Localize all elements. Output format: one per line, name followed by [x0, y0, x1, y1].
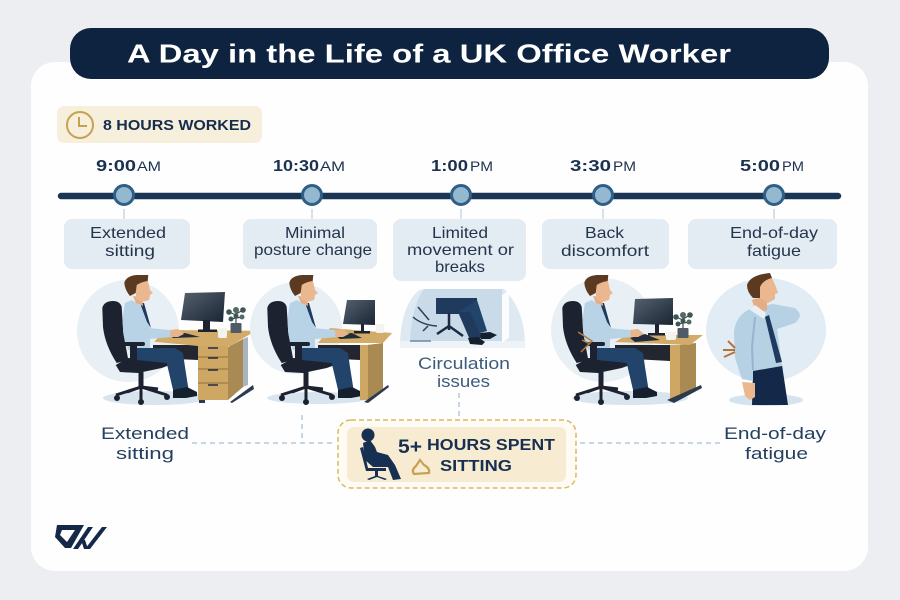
card: minimal posture change: [243, 219, 377, 269]
callout: 5+ hours spent sitting: SITTING: [440, 458, 512, 475]
label: end-of-day fatigue: End-of-day: [724, 424, 827, 443]
label: end-of-day fatigue: [724, 424, 827, 463]
label: circulation issues: Circulation: [418, 355, 510, 373]
time labels: PM: [470, 159, 493, 174]
illustration: worker with back discomfort: [551, 275, 703, 405]
time labels: [96, 158, 804, 175]
badge: 8 hours worked: 8 HOURS WORKED: [103, 117, 251, 134]
card: extended sitting: [64, 219, 190, 269]
time labels: AM: [320, 159, 345, 174]
card: extended sitting: Extended: [90, 225, 166, 242]
card: minimal posture change: Minimal: [285, 225, 345, 242]
card: limited movement or breaks: movement or: [407, 242, 515, 259]
illustration: worker at desk with drawers: [77, 275, 256, 405]
label: extended sitting: [101, 424, 189, 463]
dashed connectors: [192, 393, 720, 443]
time labels: PM: [782, 159, 804, 174]
illustration: worker at small desk: [250, 275, 392, 405]
icon: small gold seat: [413, 460, 429, 474]
label: circulation issues: [418, 355, 510, 391]
label: extended sitting: sitting: [116, 444, 174, 463]
card: limited movement or breaks: breaks: [435, 259, 485, 276]
card: minimal posture change: posture change: [254, 242, 372, 259]
badge: 8 hours worked: [57, 106, 262, 143]
time labels: PM: [613, 159, 636, 174]
label: end-of-day fatigue: fatigue: [745, 444, 808, 463]
illustration: standing worker holding neck: [706, 273, 826, 406]
card: back discomfort: Back: [585, 225, 625, 242]
illustration: legs under desk, limited movement: [400, 289, 525, 348]
timeline: [61, 186, 838, 220]
callout: 5+ hours spent sitting: [338, 420, 576, 488]
title: A Day in the Life of a UK Office Worker: [127, 38, 731, 68]
time labels: 9:00: [96, 158, 136, 175]
icon: seated person: [360, 428, 401, 480]
label: extended sitting: Extended: [101, 424, 189, 443]
card: end-of-day fatigue: fatigue: [747, 243, 801, 260]
time labels: 5:00: [740, 158, 780, 175]
card: back discomfort: discomfort: [561, 243, 650, 260]
time labels: 3:30: [570, 158, 611, 175]
card: end-of-day fatigue: End-of-day: [730, 225, 818, 242]
title: [70, 28, 829, 79]
label: circulation issues: issues: [437, 373, 490, 391]
card: limited movement or breaks: Limited: [432, 225, 488, 242]
card: limited movement or breaks: [393, 219, 526, 281]
time labels: 1:00: [431, 158, 468, 175]
callout: 5+ hours spent sitting: 5+: [398, 437, 422, 458]
card: extended sitting: sitting: [105, 243, 155, 260]
callout: 5+ hours spent sitting: HOURS SPENT: [427, 437, 556, 454]
card: back discomfort: [542, 219, 669, 269]
time labels: 10:30: [273, 158, 319, 175]
logo: [55, 525, 107, 549]
panel: main card: [31, 62, 868, 571]
time labels: AM: [137, 159, 161, 174]
card: end-of-day fatigue: [688, 219, 837, 269]
